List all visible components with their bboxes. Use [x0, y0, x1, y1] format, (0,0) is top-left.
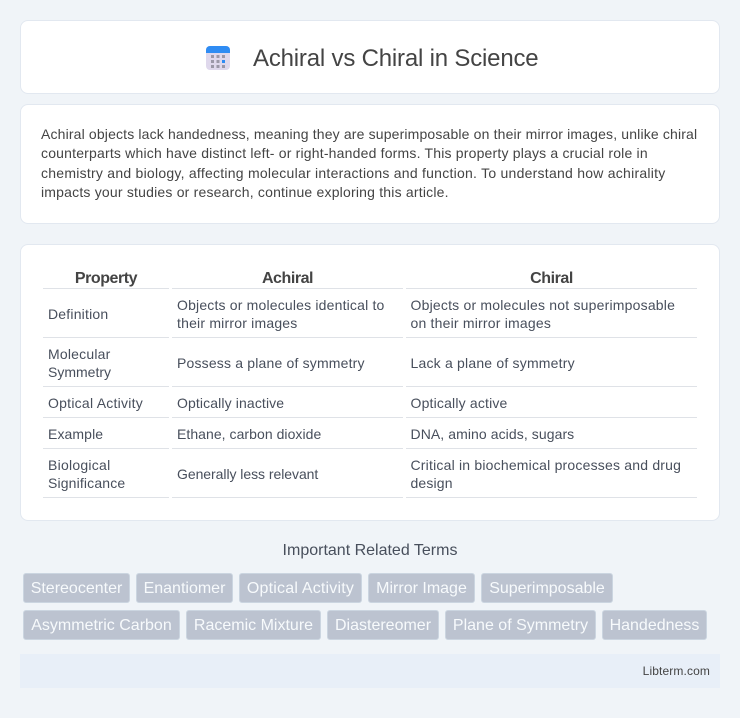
text block: introduction: counterparts which have distinct left- or right-handed forms. This property plays a crucial role in: [41, 145, 648, 161]
table row: molecular symmetry: Possess a plane of symmetry: [177, 355, 365, 371]
table row: optical activity: Optically inactive: [177, 395, 284, 411]
tag: [23, 573, 130, 603]
tag: [239, 573, 362, 603]
tag: [602, 610, 707, 640]
table row: optical activity: [43, 395, 697, 418]
tag: [445, 610, 596, 640]
table row: example: Example: [48, 426, 103, 442]
table row: example: Ethane, carbon dioxide: [177, 426, 321, 442]
footer credit: Libterm.com: [643, 664, 710, 678]
table row: definition: Objects or molecules identical to: [177, 297, 384, 313]
tag: Plane of Symmetry: [453, 617, 588, 634]
panel: comparison table: [20, 244, 720, 521]
text block: introduction: impacts your studies or research, continue exploring this article.: [41, 184, 449, 200]
table row: optical activity: Optical Activity: [48, 395, 143, 411]
tag: [481, 573, 613, 603]
title: Achiral vs Chiral in Science: [253, 45, 538, 72]
table row: definition: their mirror images: [177, 315, 298, 331]
tag: Handedness: [610, 617, 699, 634]
panel: introduction: [20, 104, 720, 224]
table header: Chiral: [530, 270, 573, 287]
table header: Property: [75, 270, 137, 287]
tag: [368, 573, 475, 603]
table header: [43, 270, 697, 289]
table row: molecular symmetry: Molecular: [48, 346, 110, 362]
table row: biological significance: design: [410, 475, 453, 491]
table row: biological significance: Significance: [48, 475, 125, 491]
table row: molecular symmetry: Lack a plane of symmetry: [410, 355, 575, 371]
text block: introduction: Achiral objects lack handedness, meaning they are superimposable on their mirror images, unlike chiral: [41, 126, 697, 142]
tag: Racemic Mixture: [194, 617, 313, 634]
table header: Achiral: [262, 270, 313, 287]
table row: molecular symmetry: [43, 346, 697, 387]
footer: [20, 654, 720, 688]
table row: example: [43, 426, 697, 449]
table row: biological significance: Generally less relevant: [177, 466, 318, 482]
table row: definition: on their mirror images: [410, 315, 551, 331]
text block: introduction: [41, 126, 697, 200]
tag: Diastereomer: [335, 617, 431, 634]
tag: Superimposable: [489, 580, 605, 597]
table row: definition: Objects or molecules not superimposable: [410, 297, 675, 313]
icon: calendar: [206, 46, 230, 70]
table row: biological significance: [43, 457, 697, 498]
table row: optical activity: Optically active: [410, 395, 508, 411]
tag: [327, 610, 439, 640]
tag: [186, 610, 321, 640]
table row: definition: Definition: [48, 306, 108, 322]
heading: important related terms: Important Related Terms: [283, 542, 457, 559]
table row: example: DNA, amino acids, sugars: [410, 426, 574, 442]
tag: Asymmetric Carbon: [31, 617, 172, 634]
table row: definition: [43, 297, 697, 338]
text block: introduction: chemistry and biology, affecting molecular interactions and function. To understand how achirality: [41, 164, 666, 180]
tag: Stereocenter: [31, 580, 122, 597]
tag: Enantiomer: [144, 580, 225, 597]
panel: title header: [20, 20, 720, 94]
table row: biological significance: Critical in biochemical processes and drug: [410, 457, 681, 473]
tag: Optical Activity: [247, 580, 354, 597]
tags: related terms: [23, 573, 707, 640]
tag: [23, 610, 180, 640]
tag: Mirror Image: [376, 580, 467, 597]
table row: molecular symmetry: Symmetry: [48, 364, 111, 380]
tag: [136, 573, 233, 603]
table row: biological significance: Biological: [48, 457, 110, 473]
